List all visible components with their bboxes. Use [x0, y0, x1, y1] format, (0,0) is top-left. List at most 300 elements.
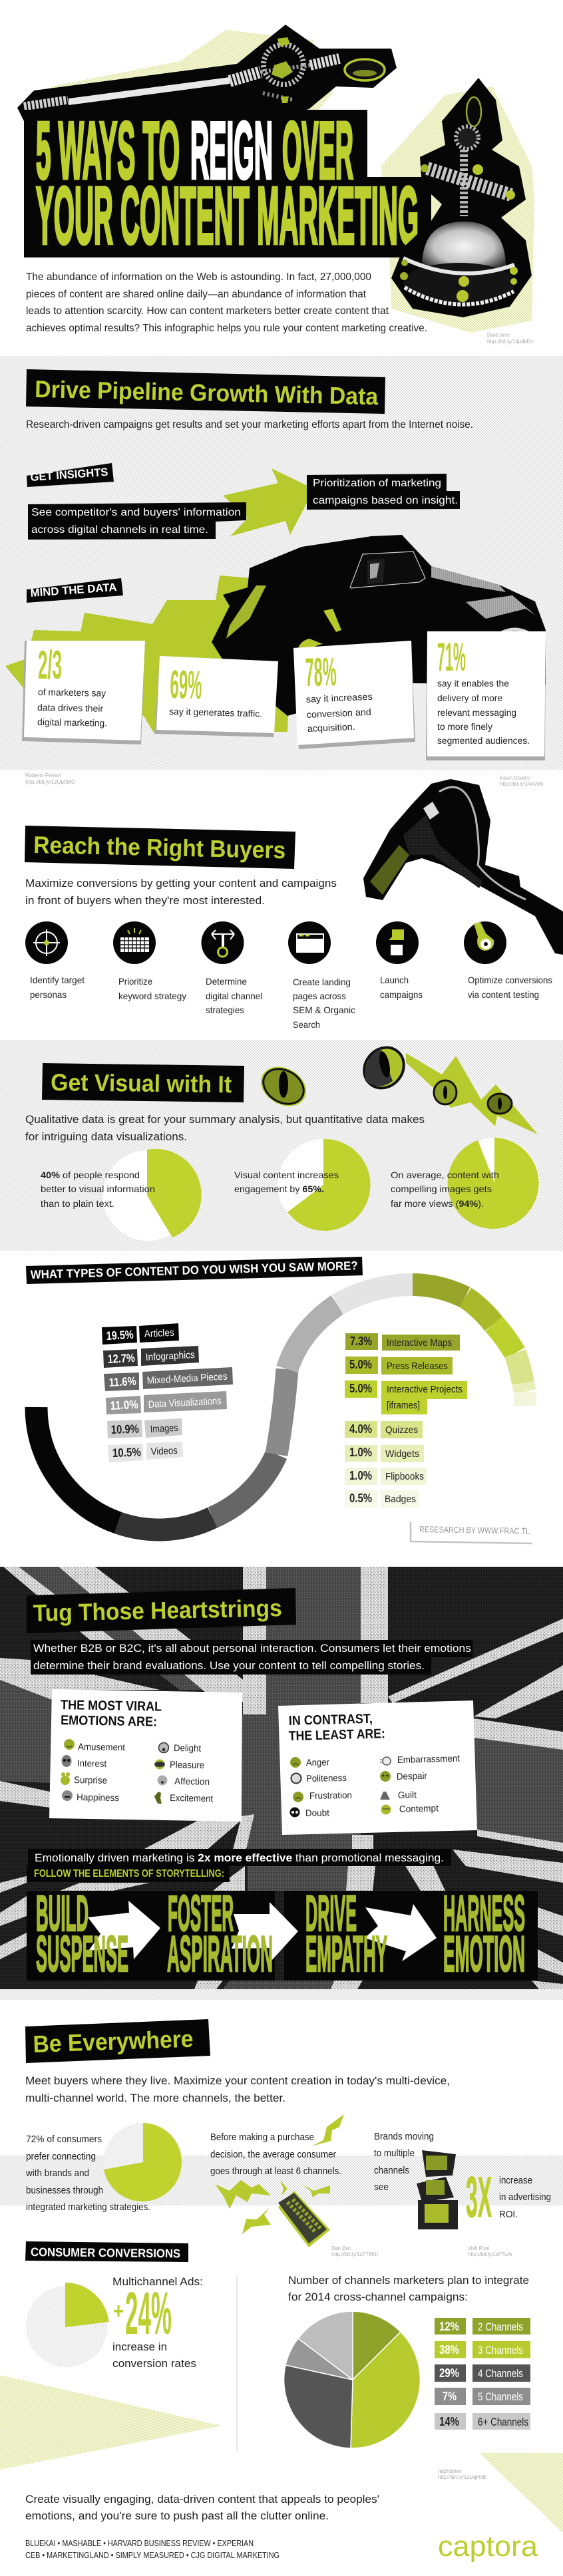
research credit callout: RESESARCH BY WWW.FRAC.TL: [419, 1524, 530, 1536]
card: 2/3: [22, 641, 145, 744]
intro paragraph: pieces of content are shared online daily—an abundance of information that: [26, 289, 367, 300]
legend row: quizzes: 4.0%: [349, 1422, 372, 1436]
paragraph: Maximize conversions by getting your content and campaigns: [25, 877, 337, 889]
photo credit: ralphbijker: ralphbijker: [438, 2468, 462, 2474]
text: 40%: better to visual information: [41, 1184, 155, 1194]
panel: be everywhere: 24%: [125, 2281, 172, 2347]
text: channel strategies: [206, 976, 262, 1015]
scepter illustration: [17, 25, 397, 124]
legend row: 4 channels: [435, 2364, 530, 2382]
legend row: press releases: [345, 1357, 453, 1374]
legend row: widgets: 1.0%: [349, 1446, 372, 1459]
storytelling band: [27, 1885, 538, 1983]
heading: Reach the Right Buyers: [33, 831, 286, 864]
legend row: interactive projects: [iframes]: [387, 1400, 420, 1411]
label: surprise: Surprise: [74, 1774, 107, 1786]
text: brands moving: see: [374, 2181, 389, 2193]
paragraph: Whether B2B or B2C, it's all about personal interaction. Consumers let their emotions: [33, 1642, 471, 1655]
intro paragraph: [26, 271, 427, 334]
storytelling band: SUSPENSE: [36, 1926, 128, 1983]
paragraph: Qualitative data is great for your summary analysis, but quantitative data makes: [25, 1113, 425, 1126]
text: 65%: [234, 1170, 339, 1194]
text: increase in conversion rates: conversion rates: [112, 2357, 196, 2370]
icon: television stack: [417, 2150, 458, 2229]
arrow 3: [365, 1904, 437, 1961]
closing statement: [25, 2493, 379, 2522]
legend row: images: Images: [150, 1422, 178, 1435]
card: most viral emotions: [49, 1689, 242, 1822]
photo credit: http://bit.ly/14pdkEn: [487, 339, 533, 345]
legend row: press releases: Press Releases: [387, 1361, 448, 1372]
label: anger: Anger: [306, 1756, 329, 1768]
text: increase in advertising ROI: ROI.: [499, 2209, 518, 2220]
prioritization box: Prioritization of marketing: [313, 478, 441, 489]
tag: consumer conversions: CONSUMER CONVERSIONS: [31, 2245, 180, 2260]
card: 2/3: data drives their: [37, 702, 104, 714]
text: increase in advertising ROI: in advertising: [499, 2191, 551, 2203]
legend row: data visualizations: [106, 1391, 227, 1414]
card heading: IN CONTRAST,: [289, 1712, 373, 1728]
text: 65%: engagement by 65%.: [234, 1184, 324, 1194]
step: build suspense: [36, 1885, 128, 1983]
text: landing pages: Create landing: [293, 977, 351, 987]
legend row: 6+ channels: 6+ Channels: [478, 2416, 528, 2428]
icon: frustration: [293, 1792, 303, 1802]
text: before purchase: [210, 2132, 341, 2177]
text: landing pages: Search: [293, 1019, 320, 1030]
right legend: [345, 1333, 467, 1508]
car illustration: [212, 535, 546, 716]
legend row: flipbooks: 1.0%: [349, 1469, 372, 1482]
legend row: data visualizations: 11.0%: [110, 1398, 138, 1412]
subheading text: Research-driven campaigns get results and set your marketing efforts apart from the Internet noise.: [26, 419, 473, 430]
s-curve chart: [36, 1285, 525, 1530]
icon: content testing: [464, 921, 506, 964]
title: [36, 105, 419, 261]
card: 2/3: of marketers say: [38, 687, 106, 699]
photo credit: Dan Zen: http://bit.ly/1zFT8Kn: [331, 2251, 378, 2257]
legend row: 2 channels: 2 Channels: [478, 2321, 523, 2333]
icon: excitement: [154, 1792, 162, 1804]
sources: CEB • MARKETINGLAND • SIMPLY MEASURED • CJG DIGITAL MARKETING: [25, 2550, 280, 2560]
text: keyword strategy: Prioritize: [118, 976, 152, 987]
icon: cat eye middle: [434, 1080, 457, 1104]
legend row: 5 channels: 5 Channels: [478, 2390, 523, 2403]
tag: mind the data: MIND THE DATA: [30, 581, 117, 599]
icon: landing page: [288, 921, 331, 964]
legend row: 4 channels: 4 Channels: [478, 2367, 523, 2380]
card: 71%: delivery of more: [437, 693, 502, 703]
panel: be everywhere: [0, 1989, 563, 2563]
label: affection: Affection: [174, 1776, 210, 1787]
icon: cat eye small: [488, 1094, 512, 1114]
paragraph: [25, 1113, 425, 1143]
heading: Be Everywhere: [33, 2025, 194, 2058]
text: content testing: Optimize conversions: [468, 975, 552, 985]
photo credit: Dan Zen: [331, 2245, 378, 2257]
text: 72% of consumers: integrated marketing strategies.: [26, 2201, 150, 2213]
label: embarrassment: Embarrassment: [397, 1753, 460, 1765]
text: increase in advertising ROI: [499, 2175, 551, 2220]
photo credit: Roberto Ferrari: http://bit.ly/1zUp5MD: [25, 779, 75, 785]
card: 2/3: 2/3: [38, 643, 62, 687]
card: 78%: [293, 641, 415, 749]
label: despair: Despair: [397, 1770, 427, 1782]
legend row: interactive projects: Interactive Projects: [387, 1384, 463, 1395]
legend row: videos: Videos: [150, 1445, 178, 1458]
icon: interest: [61, 1755, 72, 1767]
label: pleasure: Pleasure: [170, 1759, 204, 1770]
text: before purchase: Before making a purchase: [210, 2132, 314, 2143]
legend row: 4 channels: 29%: [439, 2366, 459, 2380]
text: content testing: [468, 975, 552, 1000]
pie chart: channels: [284, 2311, 420, 2448]
card: least viral emotions: [278, 1700, 477, 1835]
legend row: 3 channels: 38%: [439, 2343, 459, 2356]
text: keyword strategy: keyword strategy: [118, 991, 186, 1001]
intro paragraph: The abundance of information on the Web is astounding. In fact, 27,000,000: [26, 271, 371, 283]
arrow 1: [88, 1901, 160, 1959]
callout: emotionally driven: Emotionally driven marketing is 2x more effective than promotional messaging.: [35, 1852, 444, 1864]
text: 94%: [391, 1170, 499, 1209]
text: increase in conversion rates: increase in: [112, 2340, 167, 2353]
arrow: [223, 468, 314, 536]
card: 69%: 69%: [170, 662, 202, 707]
legend row: interactive maps: Interactive Maps: [387, 1337, 452, 1349]
text: channel strategies: Determine: [206, 976, 247, 987]
card: 71%: relevant messaging: [437, 707, 516, 718]
legend row: press releases: 5.0%: [349, 1358, 372, 1371]
icon: embarrassment: [380, 1757, 391, 1765]
step: foster aspiration: [167, 1885, 273, 1983]
legend row: interactive projects: 5.0%: [349, 1382, 372, 1395]
heading: Get Visual with It: [51, 1068, 232, 1098]
legend row: flipbooks: Flipbooks: [385, 1471, 424, 1482]
label: excitement: Excitement: [170, 1792, 213, 1804]
icon: cat eye top: [356, 1039, 412, 1096]
icon: happiness: [62, 1790, 73, 1801]
legend row: badges: Badges: [385, 1494, 416, 1505]
text: before purchase: goes through at least 6 channels.: [210, 2166, 341, 2177]
halftone backdrop behind orb: [381, 86, 534, 333]
left legend: [102, 1323, 233, 1462]
step: foster aspiration: FOSTER: [168, 1885, 234, 1942]
tag: consumer conversions: [25, 2241, 188, 2262]
legend row: images: 10.9%: [110, 1422, 139, 1436]
text: 72% of consumers: with brands and: [25, 2168, 89, 2179]
green burst: [5, 575, 293, 732]
legend row: mixed media: Mixed-Media Pieces: [146, 1371, 228, 1386]
card: 69%: [154, 656, 278, 737]
legend row: 2 channels: 12%: [439, 2320, 459, 2333]
text: identify target personas: [30, 975, 85, 1000]
text: brands moving: Brands moving: [374, 2131, 434, 2142]
icon: contempt: [381, 1804, 391, 1815]
legend row: infographics: Infographics: [145, 1349, 195, 1363]
panel: content types survey: [26, 1257, 532, 1543]
photo credit: Roberto Ferrari: Roberto Ferrari: [25, 772, 61, 778]
pie chart: 40%: [102, 1149, 202, 1241]
photo credit: Vish Pool: Vish Pool: [468, 2245, 489, 2251]
text: 40%: [41, 1170, 155, 1209]
icon: launch campaigns: [376, 921, 419, 964]
icon: target personas: [25, 921, 68, 964]
band left: [27, 1891, 275, 1981]
halftone panel background: [0, 1040, 563, 1251]
legend row: 3 channels: 3 Channels: [478, 2344, 523, 2356]
text: multichannel ads: Multichannel Ads:: [112, 2275, 203, 2288]
legend row: videos: [108, 1442, 183, 1462]
legend row: interactive maps: 7.3%: [350, 1335, 372, 1348]
stat: +24%: [113, 2281, 172, 2347]
text: 72% of consumers: businesses through: [26, 2185, 103, 2196]
icon: cat eye large: [254, 1059, 313, 1114]
pie chart: 24%: [26, 2283, 109, 2367]
icon: surprise: [61, 1772, 70, 1785]
prioritization box: [307, 474, 460, 510]
prioritization box: campaigns based on insight.: [313, 495, 458, 506]
icon: remote phone: [278, 2191, 330, 2247]
photo credit: [487, 332, 533, 345]
photo credit: ralphbijker: [438, 2468, 486, 2480]
label: delight: Delight: [174, 1742, 201, 1754]
panel: drive pipeline growth: [0, 356, 563, 770]
photo credit: David Jones: [487, 332, 510, 338]
vertical divider: [237, 2275, 238, 2452]
legend row: images: [107, 1418, 182, 1438]
subheading: storytelling: [27, 1866, 230, 1882]
legend row: articles: 19.5%: [106, 1328, 134, 1343]
card: 78%: conversion and: [306, 707, 371, 720]
icon: anger: [290, 1757, 301, 1768]
step: harness emotion: [443, 1885, 525, 1983]
tag: get insights: GET INSIGHTS: [30, 466, 108, 484]
heading tag: WHAT TYPES OF CONTENT DO YOU WISH YOU SAW MORE?: [31, 1259, 358, 1281]
icon: channels: [201, 921, 244, 964]
photo credit: ralphbijker: http://bit.ly/1zUqHoE: [438, 2474, 486, 2480]
card heading: EMOTIONS ARE:: [61, 1713, 157, 1730]
step: drive empathy: [305, 1885, 387, 1983]
chart legend: [435, 2318, 530, 2430]
step: drive empathy: DRIVE: [305, 1885, 357, 1942]
lightning bolt: [406, 1053, 538, 1134]
text: identify target personas: personas: [30, 989, 67, 1000]
legend row: 5 channels: 7%: [443, 2390, 457, 2403]
text: 72% of consumers: [25, 2134, 150, 2213]
metal detector illustration: [363, 779, 563, 955]
logo: captora: captora: [438, 2530, 538, 2563]
heading: Drive Pipeline Growth With Data: [35, 375, 379, 410]
card: 78%: 78%: [305, 649, 337, 695]
legend row: articles: [102, 1323, 179, 1345]
halftone panel background: [0, 356, 563, 770]
halftone strip behind stats: [0, 2156, 563, 2205]
card: 2/3: digital marketing.: [37, 717, 107, 728]
text: brands moving: to multiple: [374, 2148, 415, 2159]
photo credit: Kevin Dooley: http://bit.ly/14vVIrb: [500, 781, 544, 787]
label: guilt: Guilt: [398, 1789, 417, 1800]
legend row: articles: Articles: [144, 1327, 174, 1340]
chart heading: Number of channels marketers plan to integrate: [288, 2274, 529, 2287]
card: 78%: acquisition.: [307, 721, 355, 734]
label: contempt: Contempt: [399, 1802, 439, 1814]
icon: affection: [157, 1775, 168, 1786]
intro paragraph: leads to attention scarcity. How can content marketers better create content that: [26, 305, 389, 317]
insight box: [28, 502, 246, 540]
legend row: infographics: [103, 1346, 199, 1368]
text: launch campaigns: [380, 975, 423, 1000]
photo credit: Vish Pool: [468, 2245, 512, 2257]
card: 78%: say it increases: [305, 691, 373, 705]
legend row: infographics: 12.7%: [107, 1351, 135, 1366]
legend row: widgets: [345, 1445, 424, 1462]
closing statement: emotions, and you're sure to push past all the clutter online.: [25, 2509, 329, 2522]
title: 5 WAYS TO: [36, 105, 180, 196]
legend row: mixed media: 11.6%: [108, 1374, 136, 1389]
paragraph: for intriguing data visualizations.: [25, 1130, 187, 1143]
orb illustration: [391, 78, 532, 317]
text: 72% of consumers: prefer connecting: [26, 2151, 96, 2162]
panel: be everywhere: 3X: [466, 2166, 492, 2229]
icon: delight: [158, 1743, 169, 1752]
paragraph: Meet buyers where they live. Maximize your content creation in today's multi-device,: [25, 2074, 450, 2087]
legend row: 6+ channels: 14%: [439, 2415, 459, 2428]
text: identify target personas: Identify target: [30, 975, 85, 985]
icon: politeness: [291, 1774, 301, 1783]
sources: [25, 2538, 280, 2560]
paragraph: determine their brand evaluations. Use your content to tell compelling stories.: [33, 1659, 425, 1672]
legend row: badges: [345, 1490, 419, 1508]
arrow 2: [232, 1902, 298, 1961]
legend row: widgets: Widgets: [385, 1448, 419, 1460]
card heading: [61, 1698, 162, 1730]
card: 71%: [426, 631, 546, 760]
paragraph: [31, 1640, 472, 1675]
card: 71%: say it enables the: [437, 678, 509, 689]
text: 65%: Visual content increases: [234, 1170, 339, 1180]
insight box: See competitor's and buyers' information: [31, 507, 241, 518]
chart heading: for 2014 cross-channel campaigns:: [288, 2291, 468, 2303]
legend row: flipbooks: [345, 1468, 427, 1485]
pie chart: 65%: [278, 1139, 370, 1231]
card heading: [289, 1712, 385, 1744]
icon: despair: [380, 1771, 391, 1782]
research credit callout: [411, 1522, 532, 1543]
heading: Tug Those Heartstrings: [33, 1594, 282, 1627]
insight box: across digital channels in real time.: [31, 524, 208, 536]
text: brands moving: channels: [374, 2165, 409, 2176]
legend row: mixed media: [104, 1367, 233, 1391]
label: frustration: Frustration: [309, 1790, 352, 1801]
text: landing pages: [293, 977, 355, 1030]
storytelling band: EMPATHY: [305, 1926, 387, 1983]
label: happiness: Happiness: [77, 1792, 119, 1803]
paragraph: multi-channel world. The more channels, the better.: [25, 2092, 285, 2104]
storytelling band: ASPIRATION: [167, 1926, 273, 1983]
legend row: interactive maps: [345, 1333, 460, 1351]
legend row: 5 channels: [435, 2388, 530, 2405]
halftone backdrop behind scepter: [51, 30, 333, 116]
tag: mind the data: [27, 578, 123, 603]
title banner: [24, 110, 431, 257]
photo credit: Vish Pool: http://bit.ly/1zFTuAr: [468, 2251, 512, 2257]
pie chart: 94%: [448, 1138, 540, 1229]
text: landing pages: SEM & Organic: [293, 1005, 355, 1015]
icon: guilt: [380, 1792, 390, 1800]
legend row: 2 channels: [435, 2318, 530, 2334]
pie chart: 72%: [104, 2123, 182, 2201]
icon: doubt: [290, 1807, 299, 1818]
text: 40%: than to plain text.: [41, 1198, 114, 1209]
legend row: quizzes: [345, 1421, 423, 1438]
panel: tug those heartstrings: [0, 1567, 563, 1989]
paragraph: in front of buyers when they're most interested.: [25, 894, 265, 907]
text: channel strategies: digital channel: [206, 991, 262, 1001]
card: 71%: to more finely: [437, 721, 492, 732]
legend row: videos: 10.5%: [112, 1446, 141, 1460]
legend row: 3 channels: [435, 2341, 530, 2358]
icon: pleasure: [154, 1759, 165, 1770]
halftone triangle right: [479, 2453, 563, 2533]
card: 71%: segmented audiences.: [437, 735, 530, 746]
title: OVER: [282, 105, 353, 196]
sources: BLUEKAI • MASHABLE • HARVARD BUSINESS REVIEW • EXPERIAN: [25, 2538, 254, 2548]
legend row: interactive projects: [345, 1380, 467, 1414]
text: brands moving: [374, 2131, 434, 2193]
step: build suspense: BUILD: [36, 1885, 89, 1942]
hero section: [17, 25, 534, 345]
text: launch campaigns: Launch: [380, 975, 409, 985]
text: increase in advertising ROI: increase: [499, 2175, 532, 2186]
photo credit: Kevin Dooley: Kevin Dooley: [500, 775, 530, 781]
text: 94%: compelling images gets: [391, 1184, 492, 1194]
photo credit: Dan Zen: Dan Zen: [331, 2245, 351, 2251]
text: keyword strategy: [118, 976, 186, 1001]
legend row: badges: 0.5%: [349, 1492, 372, 1505]
halftone strip under flag: [0, 1989, 563, 2000]
card heading: THE LEAST ARE:: [289, 1726, 385, 1744]
title: REIGN: [190, 105, 273, 196]
intro paragraph: achieves optimal results? This infographic helps you rule your content marketing creative.: [26, 323, 427, 334]
closing statement: Create visually engaging, data-driven content that appeals to peoples': [25, 2493, 379, 2505]
flag background: [0, 1567, 563, 1989]
card heading: THE MOST VIRAL: [61, 1698, 162, 1714]
subheading: storytelling: FOLLOW THE ELEMENTS OF STORYTELLING:: [34, 1868, 224, 1879]
panel: reach the right buyers: [25, 779, 563, 1030]
stat: +24%: +: [113, 2299, 124, 2324]
label: politeness: Politeness: [306, 1772, 347, 1784]
text: 40%: 40% of people respond: [41, 1170, 140, 1180]
card: 71%: 71%: [437, 635, 466, 679]
card: 69%: say it generates traffic.: [169, 706, 262, 719]
legend row: quizzes: Quizzes: [385, 1424, 418, 1436]
band right: [284, 1891, 538, 1981]
text: channel strategies: strategies: [206, 1005, 244, 1015]
chart heading: [288, 2274, 529, 2303]
photo credit: Kevin Dooley: [500, 775, 544, 787]
paragraph: [25, 2074, 450, 2104]
text: launch campaigns: campaigns: [380, 989, 423, 1000]
label: interest: Interest: [77, 1758, 106, 1769]
icon: keyboard: [113, 921, 156, 964]
text: increase in conversion rates: [112, 2340, 196, 2370]
paragraph: [25, 877, 337, 907]
text: landing pages: pages across: [293, 991, 346, 1001]
photo credit: Roberto Ferrari: [25, 772, 75, 785]
lightning bolts: [215, 2114, 344, 2234]
text: before purchase: decision, the average consumer: [210, 2149, 336, 2160]
halftone triangle left: [0, 2375, 222, 2470]
